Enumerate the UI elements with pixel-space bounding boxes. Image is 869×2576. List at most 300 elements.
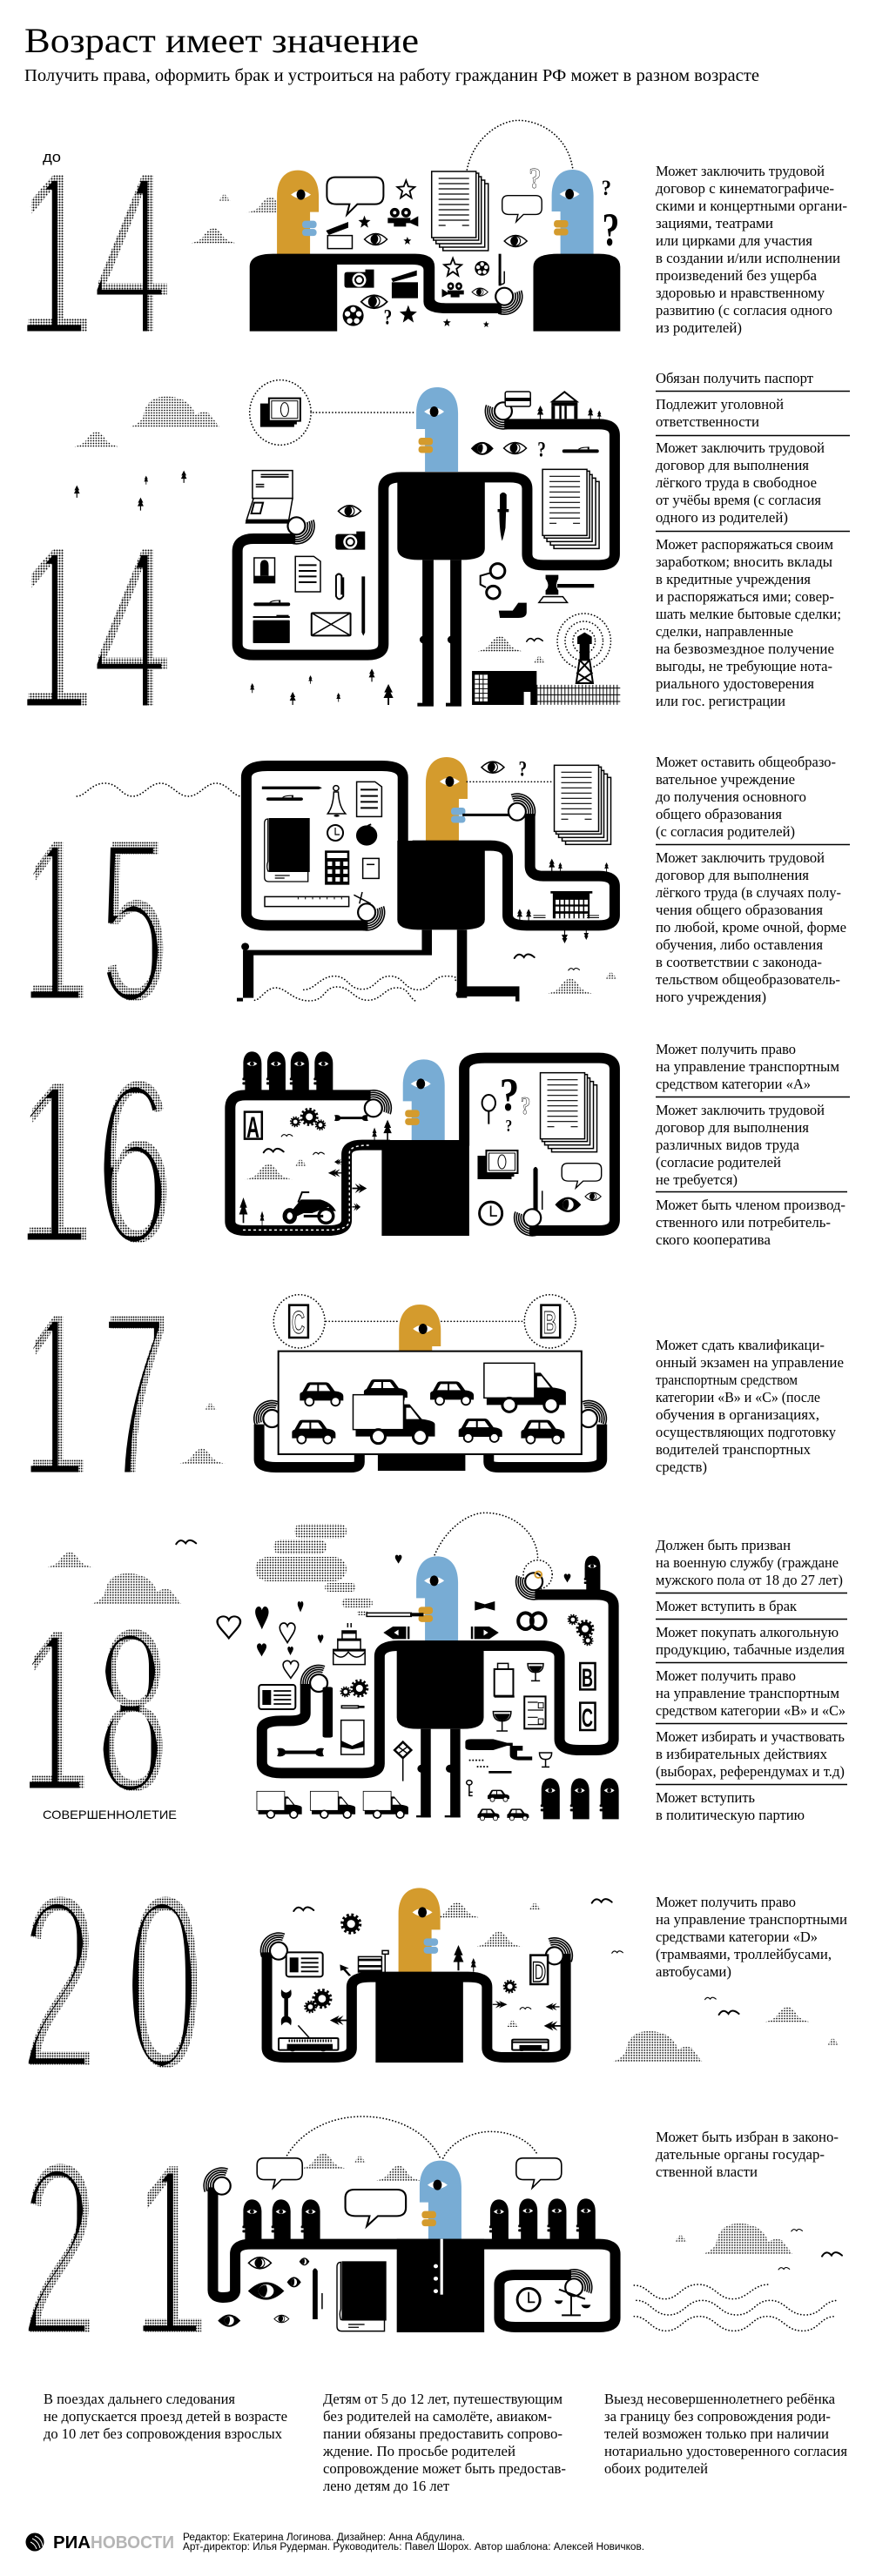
gears — [340, 1615, 593, 1696]
icon: star outline — [397, 180, 414, 198]
text: 16: различных видов труда — [656, 1137, 800, 1153]
arrows — [330, 2001, 561, 2030]
plates frames — [580, 1663, 596, 1730]
footnote: поезда — [44, 2391, 287, 2442]
footnote: выезд за границу: обоих родителей — [604, 2460, 708, 2477]
smoke clouds — [255, 1524, 373, 1615]
text: 15: Может оставить общеобразо- — [656, 754, 836, 770]
letter plates: B, C — [582, 1664, 593, 1733]
number: 20: 20 — [22, 1843, 204, 2121]
text: 18: Может получить право — [656, 1667, 796, 1684]
icon: pencil — [313, 2268, 322, 2319]
text: до 14: в создании и/или исполнении — [656, 250, 840, 266]
hand and wrench — [334, 1090, 391, 1121]
text: 14: и распоряжаться ими; совер- — [656, 588, 834, 605]
credits: Арт-директор: Илья Рудерман. Руководитель: Павел Шорох. Автор шаблона: Алексей Новичков. — [183, 2542, 644, 2553]
text: 21 — [656, 2129, 839, 2180]
credits: Редактор: Екатерина Логинова. Дизайнер: Анна Абдулина. — [183, 2532, 465, 2543]
dotted arc — [434, 1513, 538, 1560]
icon: star outline — [444, 258, 461, 276]
text: 18: на военную службу (граждане — [656, 1554, 839, 1571]
text: до 14: или цирками для участия — [656, 232, 812, 249]
illustration: 17 лет — [177, 1295, 606, 1471]
letter plates: B, C: B — [582, 1664, 593, 1693]
icon: eye — [361, 295, 387, 308]
left arm pipe — [230, 1095, 390, 1231]
torso left with arm pipe — [250, 254, 502, 332]
icon: road sign — [359, 1950, 388, 1972]
trees — [74, 406, 602, 705]
illustration: 15 лет — [77, 756, 617, 1002]
icon: hand with scissors — [354, 892, 385, 930]
icon: magnifier — [482, 1095, 495, 1124]
school frame pipe — [246, 766, 403, 925]
icon: small video camera — [442, 282, 464, 298]
footnote: поезда: В поездах дальнего следования — [44, 2391, 235, 2407]
number: 18: 18 — [17, 1581, 165, 1843]
icon: eye — [338, 506, 360, 517]
text: 20: средствами категории «D» — [656, 1929, 818, 1945]
footnote: поезда: не допускается проезд детей в возрасте — [44, 2408, 287, 2425]
text: 15: ного учреждения) — [656, 989, 766, 1005]
icon: cigarette — [367, 1613, 423, 1616]
icon: wine glasses — [493, 1664, 552, 1767]
icon: person — [584, 1556, 600, 1591]
dotted gaze line — [467, 781, 552, 782]
dotted arcs — [287, 2116, 538, 2158]
birds — [778, 2229, 842, 2270]
torso with tie and buttons — [397, 2239, 484, 2332]
icon: folder — [253, 615, 290, 643]
hand with fat stem — [301, 1665, 333, 1738]
number: 16: 16 — [15, 1032, 171, 1295]
icon: film reel — [343, 305, 364, 326]
footnote: самолёт: пании обязаны предоставить сопрово- — [323, 2425, 562, 2442]
icon: pencil — [361, 576, 365, 636]
icon: document stack — [541, 1073, 597, 1152]
icon: gun — [499, 603, 527, 618]
icon: ruler — [265, 896, 349, 907]
letter plate frame: A — [245, 1112, 262, 1139]
icon: paper clip — [336, 574, 343, 599]
text: 14: лёгкого труда в свободное — [656, 474, 817, 491]
dotted waves — [77, 783, 456, 1001]
text: 14: на безвозмездное получение — [656, 641, 834, 657]
clouds — [188, 194, 296, 244]
text: 20: автобусами) — [656, 1963, 731, 1980]
trees — [517, 859, 609, 943]
hands — [260, 1933, 572, 1964]
icon: milk carton — [341, 1721, 364, 1754]
text: 14: риального удостоверения — [656, 675, 814, 692]
icon: speech bubble — [562, 1164, 602, 1188]
dotted small circle with ring — [516, 1560, 552, 1600]
dotted circles and links — [273, 1295, 576, 1348]
icon: photo camera — [345, 270, 374, 288]
text: 14 — [656, 370, 850, 709]
text: 15: вательное учреждение — [656, 771, 795, 788]
icon: lighthouse — [557, 614, 610, 683]
right arm pipe — [413, 814, 615, 925]
footnote: самолёт: лено детям до 16 лет — [323, 2478, 449, 2494]
head: orange figure — [399, 1888, 441, 1972]
text: 18: Может покупать алкогольную — [656, 1624, 839, 1640]
icon: ID card — [286, 1952, 323, 1976]
hand — [204, 2168, 231, 2195]
persons row — [242, 2198, 596, 2240]
text: 16: Может получить право — [656, 1041, 796, 1057]
icon: small star — [403, 237, 411, 245]
text: 18: средством категории «В» и «С» — [656, 1702, 845, 1719]
icon: hand — [565, 2270, 592, 2296]
text: до 14: Может заключить трудовой — [656, 163, 825, 179]
icon: envelope — [312, 613, 351, 635]
text: 20 — [656, 1894, 847, 1980]
icon: question marks: ? — [529, 162, 541, 195]
icon: document — [357, 782, 381, 816]
right arm pipe — [464, 1058, 615, 1231]
number: 17: 17 — [19, 1265, 168, 1528]
road marking — [243, 1145, 369, 1230]
number: 21: 21 — [22, 2110, 209, 2388]
number: 17: 17 — [23, 1262, 172, 1526]
icon: question marks — [384, 162, 619, 329]
letter plates: C, B: C — [292, 1305, 305, 1340]
text: 14: Может заключить трудовой — [656, 439, 825, 456]
text: 17: средств) — [656, 1459, 707, 1475]
footnote: самолёт: без родителей на самолёте, авиаком- — [323, 2408, 552, 2425]
bird and tiny cloud — [507, 2007, 531, 2027]
icon: video camera — [387, 208, 418, 226]
icon: motorcycle — [285, 1192, 336, 1223]
number: 15: 15 — [19, 790, 165, 1054]
icon: scales — [555, 2290, 590, 2315]
text: 16: на управление транспортным — [656, 1058, 840, 1075]
letter plates: B, C: C — [582, 1704, 593, 1733]
icon: pen — [253, 600, 290, 606]
persons row — [541, 1778, 619, 1819]
text: 21: дательные органы государ- — [656, 2146, 825, 2163]
number: 21: 21 — [18, 2113, 205, 2391]
icon: clock — [480, 1202, 502, 1224]
label: совершеннолетие: СОВЕРШЕННОЛЕТИЕ — [43, 1808, 177, 1821]
text: до 14: развитию (с согласия одного — [656, 302, 832, 319]
icon: calendar with hand — [246, 471, 314, 544]
footnote: выезд за границу: нотариально удостоверенного согласия — [604, 2443, 847, 2459]
icon: tram — [279, 2025, 338, 2051]
logo: РИА Новости — [26, 2532, 174, 2553]
text: 15: чения общего образования — [656, 902, 823, 918]
text: 15: тельством общеобразователь- — [656, 971, 840, 988]
text: 16 — [656, 1041, 850, 1248]
dots and cigarette — [470, 1761, 512, 1774]
text: 15: до получения основного — [656, 788, 806, 805]
text: 16: ского кооператива — [656, 1231, 771, 1248]
icon: building — [540, 891, 593, 918]
icon: document stack — [555, 765, 611, 844]
letter plates: C, B: B — [543, 1305, 556, 1340]
icon: clapper — [326, 222, 352, 249]
torso — [378, 1454, 465, 1471]
icon: wrench — [277, 1748, 324, 1756]
gears — [291, 1109, 325, 1130]
icon: pouring bottle — [465, 1739, 532, 1761]
icon: question mark: ? — [537, 437, 546, 461]
cloud and bird — [475, 636, 545, 662]
letter plate: A: A — [246, 1111, 259, 1144]
icon: banknotes — [477, 1150, 518, 1179]
icon: handcuffs — [481, 564, 505, 599]
icons: eyes — [471, 442, 527, 455]
text: 14: от учёбы время (с согласия — [656, 492, 821, 508]
icon: photo camera — [335, 532, 365, 550]
icon: star — [359, 216, 371, 228]
icon: film reel — [475, 261, 489, 276]
arm pipe — [262, 1594, 614, 1773]
icon: book — [337, 2261, 387, 2331]
text: 18: Должен быть призван — [656, 1537, 791, 1553]
torso — [375, 1972, 463, 2063]
icon: checklist — [524, 1696, 546, 1728]
gears — [305, 1981, 515, 2012]
arm pipe — [212, 2187, 616, 2327]
text: 15: в соответствии с законода- — [656, 954, 822, 970]
text: 18: мужского пола от 18 до 27 лет) — [656, 1572, 843, 1588]
vehicles — [292, 1363, 566, 1444]
text: 14: Может распоряжаться своим — [656, 536, 834, 553]
icon: clock — [327, 825, 343, 841]
text: 20: на управление транспортными — [656, 1911, 847, 1928]
icon: gavel — [539, 575, 594, 602]
clouds — [177, 1403, 227, 1464]
text: 15: Может заключить трудовой — [656, 849, 825, 866]
text: 14: сделки, направленные — [656, 623, 793, 640]
icon: question mark: ? — [519, 756, 527, 781]
icon: ballot sign — [394, 1742, 411, 1781]
illustration: 20 лет — [260, 1888, 839, 2063]
icon: photo ID — [254, 558, 275, 583]
number: 14: 14 — [13, 499, 169, 761]
icon: rings — [518, 1613, 546, 1629]
torso and legs — [397, 477, 485, 707]
text: 17: водителей транспортных — [656, 1441, 812, 1458]
clouds — [71, 396, 219, 447]
text: 17: обучения в организациях, — [656, 1406, 819, 1423]
arm pipes — [267, 1952, 566, 2057]
icon: pencil — [262, 787, 322, 789]
text: 17: категории «В» и «С» (после — [656, 1389, 820, 1405]
illustration: 14 лет — [71, 380, 620, 707]
text: 16: средством категории «А» — [656, 1076, 811, 1092]
label: до: до — [43, 149, 61, 165]
text: 16: (согласие родителей — [656, 1154, 781, 1171]
dotted circle with banknotes — [250, 380, 415, 445]
footnote: поезда: до 10 лет без сопровождения взрослых — [44, 2425, 283, 2442]
icon: black clapper — [391, 271, 418, 299]
logo: РИА Новости: РИА — [53, 2533, 91, 2553]
text: 14: заработком; вносить вклады — [656, 553, 832, 570]
icons: small cars — [477, 1790, 529, 1821]
torso right — [533, 254, 620, 332]
text: 18: Может избирать и участвовать — [656, 1728, 845, 1745]
illustration: 16 лет — [230, 1051, 615, 1236]
trees — [239, 1120, 392, 1225]
text: до 14: произведений без ущерба — [656, 267, 818, 284]
logo: РИА Новости: НОВОСТИ — [91, 2533, 174, 2553]
text: 18 — [656, 1537, 847, 1823]
birds and clouds — [293, 1899, 839, 2062]
text: 15: по любой, кроме очной, форме — [656, 919, 846, 936]
icon: question marks: ? — [384, 305, 392, 329]
icon: ID card — [259, 1685, 295, 1709]
plate frame: D — [530, 1955, 548, 1984]
text: 16: ственного или потребитель- — [656, 1214, 831, 1231]
trees — [454, 1945, 476, 1972]
footnote: самолёт: ждение. По просьбе родителей — [322, 2443, 515, 2459]
number: 15: 15 — [23, 788, 169, 1051]
text: до 14: зациями, театрами — [656, 215, 773, 231]
icon: stars — [400, 305, 489, 327]
text: 17: Может сдать квалификаци- — [656, 1337, 825, 1353]
icon: eye — [504, 235, 527, 246]
persons row — [242, 1051, 333, 1092]
illustration: 18 лет — [44, 1513, 619, 1821]
number: 14 (до): 14 — [17, 122, 172, 385]
icon: bank — [551, 392, 577, 419]
text: 18: (выборах, референдумах и т.д) — [656, 1763, 845, 1780]
head: blue figure — [552, 170, 594, 254]
icon: eye — [482, 761, 504, 773]
footnote: выезд за границу: Выезд несовершеннолетнего ребёнка — [604, 2391, 836, 2407]
birds and clouds — [515, 954, 617, 994]
speech bubbles — [257, 2158, 562, 2226]
head: orange figure — [277, 171, 319, 255]
arrow up-left — [340, 1964, 351, 1976]
icon: question marks: ? — [505, 1116, 512, 1135]
text: 14: договор для выполнения — [656, 457, 809, 473]
text: 17: осуществляющих подготовку — [656, 1424, 837, 1440]
icon: small eye — [472, 288, 488, 296]
icon: calculator — [325, 850, 349, 885]
text: 14: или гос. регистрации — [656, 693, 785, 709]
text: 18: в политическую партию — [656, 1807, 805, 1823]
text: 18: на управление транспортным — [656, 1685, 840, 1701]
subtitle: Получить права, оформить брак и устроиться на работу гражданин РФ может в разном возрасте — [24, 66, 759, 85]
icon: bus — [512, 2040, 549, 2051]
head: blue figure — [403, 1059, 445, 1144]
icon: bell — [327, 786, 346, 817]
icon: apple — [356, 824, 377, 846]
text: 14: в кредитные учреждения — [656, 571, 811, 587]
icon: question marks: ? — [603, 205, 619, 256]
hearts — [218, 1555, 570, 1678]
text: 17: онный экзамен на управление — [656, 1354, 844, 1371]
icon: gear — [342, 1915, 360, 1933]
torso and legs — [237, 841, 519, 1002]
icon: black eye — [555, 1197, 581, 1212]
number: 14: 14 — [17, 496, 172, 759]
hands — [254, 1400, 606, 1427]
clouds — [298, 2153, 792, 2254]
icon: question marks: ? — [500, 1069, 519, 1121]
text: 15: (с согласия родителей) — [656, 823, 795, 840]
icon: key — [467, 1781, 473, 1796]
head: orange figure — [399, 1305, 441, 1389]
text: 14: выгоды, не требующие нота- — [656, 658, 832, 674]
text: до 14: скими и концертными органи- — [656, 198, 847, 214]
illustration: 21 год — [204, 2116, 842, 2332]
icon: collars — [383, 1627, 499, 1639]
text: 15: лёгкого труда (в случаях полу- — [656, 884, 841, 901]
text: до 14: из родителей) — [656, 319, 742, 336]
text: 18: Может вступить — [656, 1789, 755, 1806]
text: 20: Может получить право — [656, 1894, 796, 1910]
text: 17: транспортным средством — [656, 1372, 798, 1388]
text: 16: не требуется) — [656, 1171, 738, 1188]
icon: question marks: ? — [521, 1092, 530, 1120]
head: orange figure — [426, 757, 468, 842]
icon: pen — [562, 446, 599, 453]
trucks — [257, 1791, 408, 1818]
title: Возраст имеет значение — [24, 21, 419, 60]
illustration: до 14 лет — [188, 120, 620, 332]
icon: wedding cake — [333, 1623, 365, 1665]
dotted waves — [634, 2284, 839, 2331]
icon: document — [295, 556, 320, 592]
icon: wrench — [281, 1989, 292, 2025]
text: 14: шать мелкие бытовые сделки; — [656, 606, 841, 622]
text: 18: Может вступить в брак — [656, 1598, 798, 1614]
icon: pencil with hand — [515, 1167, 542, 1236]
dotted arc between heads — [467, 120, 573, 170]
head: blue figure — [420, 2161, 461, 2245]
icon: pen — [266, 795, 303, 801]
icon: question marks — [500, 1069, 530, 1135]
text: 16: Может быть членом производ- — [656, 1197, 845, 1213]
number: 18: 18 — [21, 1579, 169, 1841]
icon: bottle — [495, 1663, 515, 1698]
fence — [536, 688, 620, 701]
icon: small eye — [585, 1192, 601, 1200]
icon: document stack — [432, 171, 488, 251]
text: до 14: договор с кинематографиче- — [656, 180, 834, 197]
footnote: самолёт: Детям от 5 до 12 лет, путешествующим — [323, 2391, 563, 2407]
icons: eyes — [218, 2257, 309, 2327]
hand with card — [485, 392, 530, 429]
number: 16: 16 — [18, 1030, 174, 1292]
text: 20: (трамваями, троллейбусами, — [656, 1946, 832, 1962]
text: 21: ственной власти — [656, 2163, 758, 2180]
footnote: самолёт — [322, 2391, 566, 2494]
letter plate: D: D — [532, 1956, 546, 1988]
text: 14: Подлежит уголовной — [656, 396, 784, 413]
text: 14: одного из родителей) — [656, 509, 788, 526]
text: 15: обучения, либо оставления — [656, 936, 823, 953]
icon: question marks: ? — [602, 177, 611, 200]
icon: bow tie — [475, 1601, 495, 1611]
footnote: самолёт: сопровождение может быть предостав- — [323, 2460, 566, 2477]
icon: building — [472, 671, 536, 705]
icon: eye — [365, 233, 387, 245]
text: 15: общего образования — [656, 806, 782, 822]
arm and hand — [462, 794, 535, 821]
number: 14 (до): 14 — [13, 124, 169, 387]
icon: pen with hand — [495, 254, 522, 314]
arrows — [328, 1159, 367, 1211]
icon: small speech bubble — [502, 196, 542, 222]
birds and clouds — [244, 1134, 324, 1180]
text: 14: Обязан получить паспорт — [656, 370, 813, 386]
